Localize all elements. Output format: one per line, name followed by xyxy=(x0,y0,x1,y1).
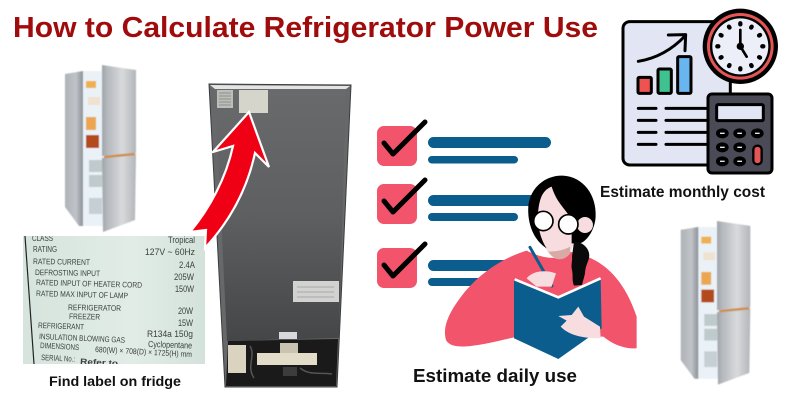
photo: rating label: DEFROSTING INPUT xyxy=(35,268,100,278)
title: How to Calculate Refrigerator Power Use xyxy=(13,12,598,44)
photo: rating label: FREEZER xyxy=(69,312,100,322)
clock xyxy=(703,9,778,84)
photo: rating label: RATING xyxy=(33,245,57,254)
caption: find label: Find label on fridge xyxy=(49,373,181,389)
check item 2 xyxy=(377,180,551,224)
calculator xyxy=(708,94,772,173)
photo: rating label: 680(W) × 708(D) × 1725(H) mm xyxy=(95,345,193,359)
photo: rating label: Cyclopentane xyxy=(148,339,192,351)
photo: rating label: CLASS xyxy=(32,234,53,243)
icon: report with clock and calculator xyxy=(623,9,778,173)
photo: rating label: SERIAL No.: xyxy=(41,353,75,364)
caption: monthly cost: Estimate monthly cost xyxy=(600,184,765,201)
photo: rating label: Tropical xyxy=(168,235,195,245)
photo: rating label: 2.4A xyxy=(179,260,195,270)
photo: fridge rear panel xyxy=(209,84,351,387)
caption: daily use: Estimate daily use xyxy=(413,365,577,386)
photo: rating label: Refer to xyxy=(80,357,118,368)
photo: rating label: 150W xyxy=(175,284,194,294)
photo: rating label xyxy=(23,234,205,368)
photo: rating label: DIMENSIONS xyxy=(40,341,79,352)
photo: open fridge, top left xyxy=(65,65,136,232)
check item 1 xyxy=(377,122,551,166)
photo: rating label: 205W xyxy=(174,272,194,282)
illustration: woman reading xyxy=(445,176,637,359)
photo: rating label: RATED CURRENT xyxy=(33,257,90,267)
red arrow xyxy=(190,112,269,248)
photo: rating label: REFRIGERANT xyxy=(38,321,84,332)
photo: rating label: 127V ~ 60Hz xyxy=(145,247,195,257)
photo: rating label: R134a 150g xyxy=(147,329,193,339)
photo: rating label: INSULATION BLOWING GAS xyxy=(39,332,125,345)
photo: rating label: 20W xyxy=(178,306,193,316)
photo: open fridge, bottom right xyxy=(681,221,750,385)
report sheet xyxy=(623,22,730,165)
photo: rating label: RATED INPUT OF HEATER CORD xyxy=(36,278,142,290)
photo: rating label: REFRIGERATOR xyxy=(68,303,121,313)
check item 3 xyxy=(377,244,528,288)
checklist xyxy=(377,122,551,288)
photo: rating label: 15W xyxy=(178,318,193,328)
photo: rating label: RATED MAX INPUT OF LAMP xyxy=(36,289,128,300)
